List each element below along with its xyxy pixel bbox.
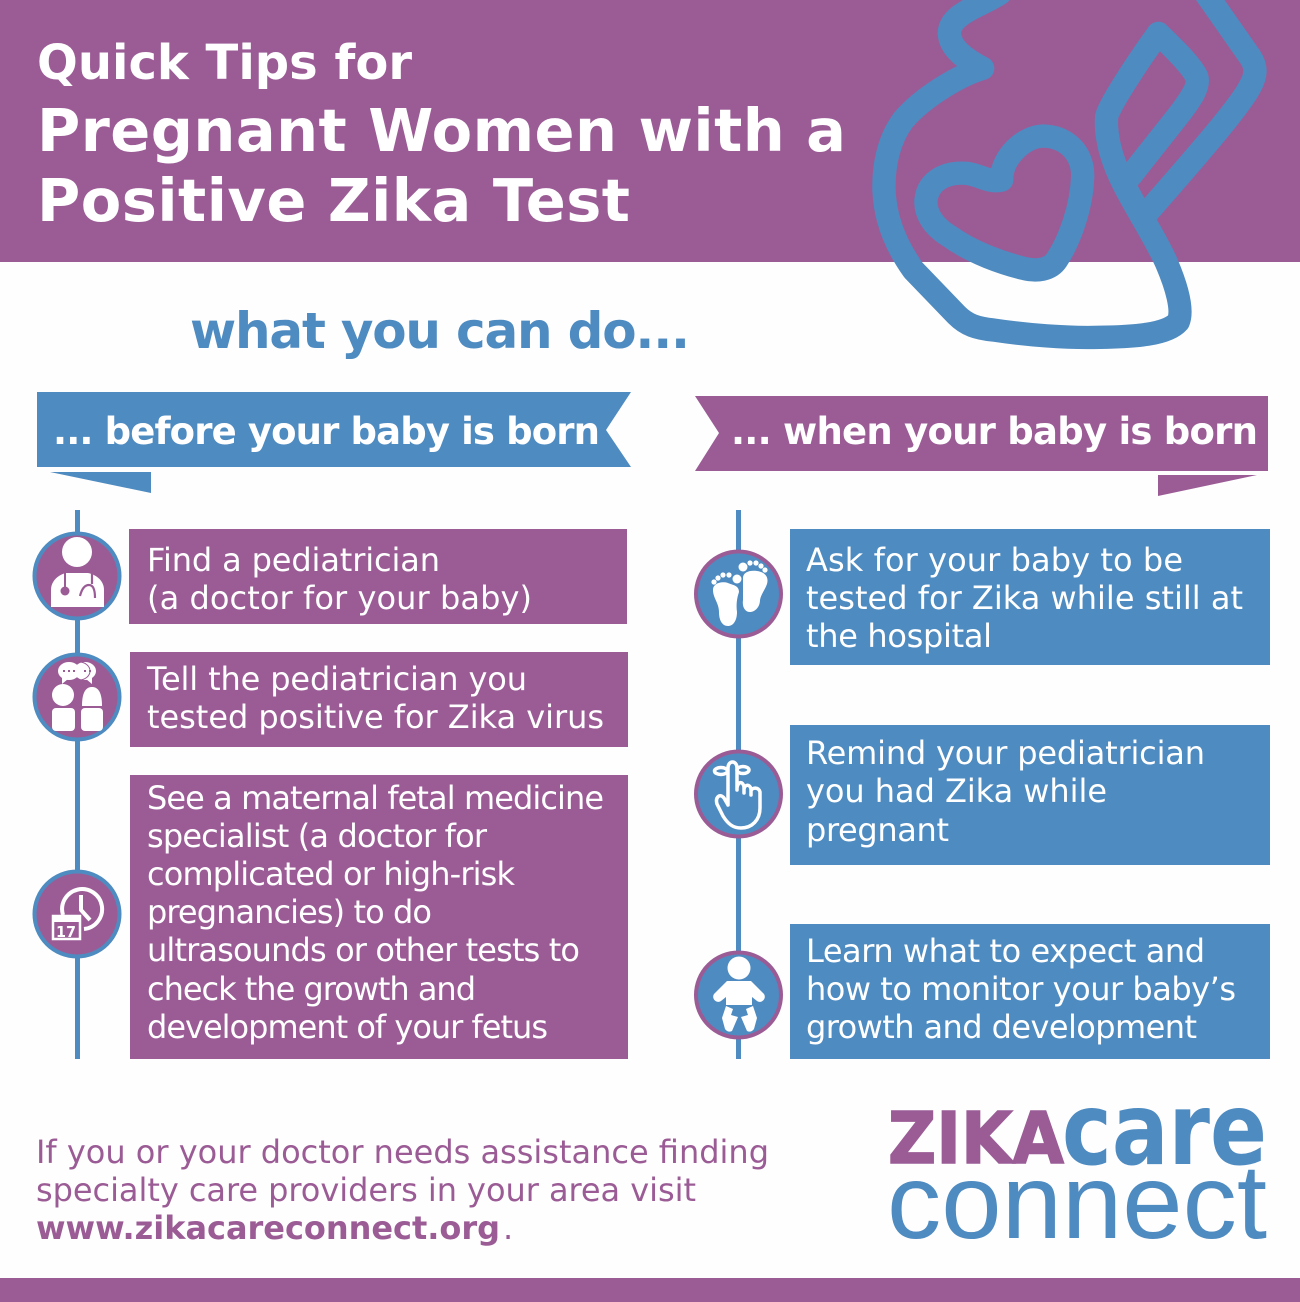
icon: pregnant body with heart [884,0,1255,338]
panel: tell the pediatrician: Tell the pediatrician you [146,660,527,698]
icon: conversation [34,654,120,740]
panel: see a specialist: pregnancies) to do [147,893,432,931]
footer text: specialty care providers in your area visit [36,1171,696,1209]
panel: see a specialist: complicated or high-risk [147,855,515,893]
icon: baby [696,952,781,1038]
panel: learn what to expect: growth and development [806,1008,1197,1046]
panel: test baby for Zika: tested for Zika while still at [806,579,1243,617]
heading: what you can do: what you can do... [190,302,690,360]
banner: when your baby is born [695,396,1268,496]
panel: see a specialist: ultrasounds or other tests to [147,931,580,969]
panel: learn what to expect: Learn what to expect and [806,932,1205,970]
panel: tell the pediatrician [130,652,628,747]
logo: Zika Care Connect: ZIKA [888,1097,1064,1180]
icon: baby feet [696,552,781,636]
banner: when your baby is born: ... when your baby is born [731,410,1258,453]
footer text: . [503,1209,513,1247]
panel: remind your pediatrician: pregnant [806,811,949,849]
timeline: at birth [736,510,741,1059]
header band [0,0,1300,262]
panel: see a specialist: development of your fetus [147,1008,548,1046]
logo: Zika Care Connect [887,1071,1267,1261]
panel: see a specialist: See a maternal fetal medicine [147,779,604,817]
panel: remind your pediatrician: you had Zika while [806,772,1107,810]
panel: test baby for Zika: Ask for your baby to be [806,541,1183,579]
logo: Zika Care Connect: care [1062,1071,1267,1188]
bottom band [0,1278,1300,1302]
timeline: before birth [75,510,80,1059]
footer text: If you or your doctor needs assistance finding [36,1133,769,1171]
footer text [36,1133,769,1247]
panel: test baby for Zika [790,529,1270,665]
icon: clock and calendar [34,872,120,956]
logo: Zika Care Connect: connect [887,1143,1267,1261]
banner: before your baby is born [37,392,631,493]
icon: clock and calendar: 17 [56,923,76,941]
panel: find a pediatrician: Find a pediatrician [147,541,440,579]
title [37,35,846,235]
panel: find a pediatrician [129,529,627,624]
title: Quick Tips for [37,35,412,91]
banner: before your baby is born: ... before your baby is born [53,410,600,453]
panel: remind your pediatrician: Remind your pediatrician [806,734,1205,772]
panel: test baby for Zika: the hospital [806,617,992,655]
icon: finger with string [696,752,781,836]
panel: see a specialist: specialist (a doctor for [147,817,488,855]
panel: see a specialist [130,775,628,1059]
panel: find a pediatrician: (a doctor for your baby) [147,579,532,617]
panel: learn what to expect: how to monitor your baby’s [806,970,1236,1008]
panel: learn what to expect [790,924,1270,1059]
panel: remind your pediatrician [790,725,1270,865]
panel: see a specialist: check the growth and [147,970,476,1008]
title: Pregnant Women with a [37,96,846,165]
panel: tell the pediatrician: tested positive for Zika virus [147,698,604,736]
title: Positive Zika Test [37,166,630,235]
footer text: www.zikacareconnect.org [36,1209,500,1247]
icon: doctor [34,534,120,618]
